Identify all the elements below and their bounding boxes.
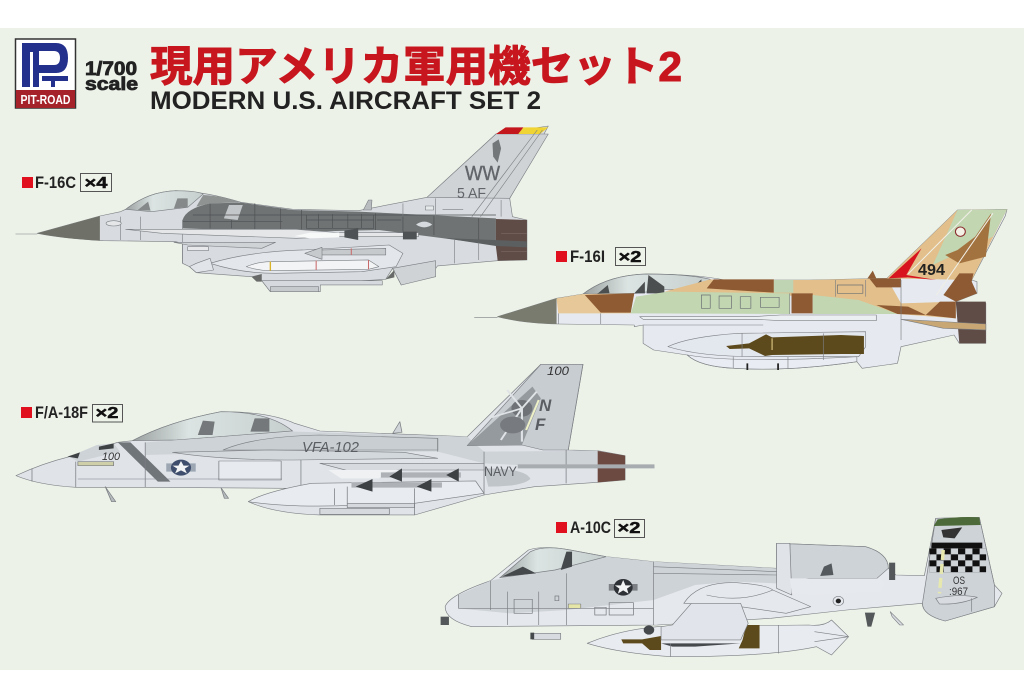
logo: Pit-Road: PIT-ROAD — [20, 92, 70, 107]
logo: Pit-Road — [16, 39, 76, 108]
label: F-16C x4: ×4 — [84, 175, 108, 192]
tail code: WW — [465, 163, 500, 185]
markings: NF: N — [539, 396, 552, 415]
aircraft: F-16C: 5 AF — [457, 185, 486, 202]
label: F/A-18F x2: ×2 — [96, 405, 119, 422]
markings: NAVY: NAVY — [484, 463, 518, 479]
label: A-10C x2 — [556, 518, 644, 538]
aircraft: F-16C — [15, 126, 548, 292]
markings: 100 nose: 100 — [102, 451, 121, 463]
label: A-10C x2: A-10C — [570, 518, 611, 537]
scale label: 1/700 — [85, 59, 137, 80]
aircraft: F/A-18F — [16, 364, 654, 515]
aircraft: F-16I — [474, 209, 1007, 370]
label: F-16C x4 — [22, 173, 112, 192]
title: Japanese: 現用アメリカ軍用機セット2 — [150, 43, 682, 90]
tail number: 967: :967 — [949, 586, 968, 598]
label: F/A-18F x2 — [21, 403, 122, 422]
scale label: scale — [85, 74, 138, 94]
aircraft: A-10C — [441, 517, 1002, 657]
label: F-16I x2: F-16I — [570, 247, 605, 266]
markings: 100 top: 100 — [547, 364, 569, 378]
label: A-10C x2: ×2 — [618, 520, 641, 537]
label: F/A-18F x2: F/A-18F — [35, 403, 88, 422]
tail number: 494 — [918, 262, 945, 279]
label: F-16I x2 — [556, 247, 646, 266]
aircraft: F/A-18F: F — [535, 415, 546, 434]
title: English: MODERN U.S. AIRCRAFT SET 2 — [150, 87, 541, 115]
tail code: OS: OS — [953, 575, 965, 587]
scale label — [85, 59, 138, 94]
markings: VFA-102: VFA-102 — [302, 439, 360, 456]
label: F-16C x4: F-16C — [35, 173, 76, 192]
label: F-16I x2: ×2 — [618, 249, 642, 266]
